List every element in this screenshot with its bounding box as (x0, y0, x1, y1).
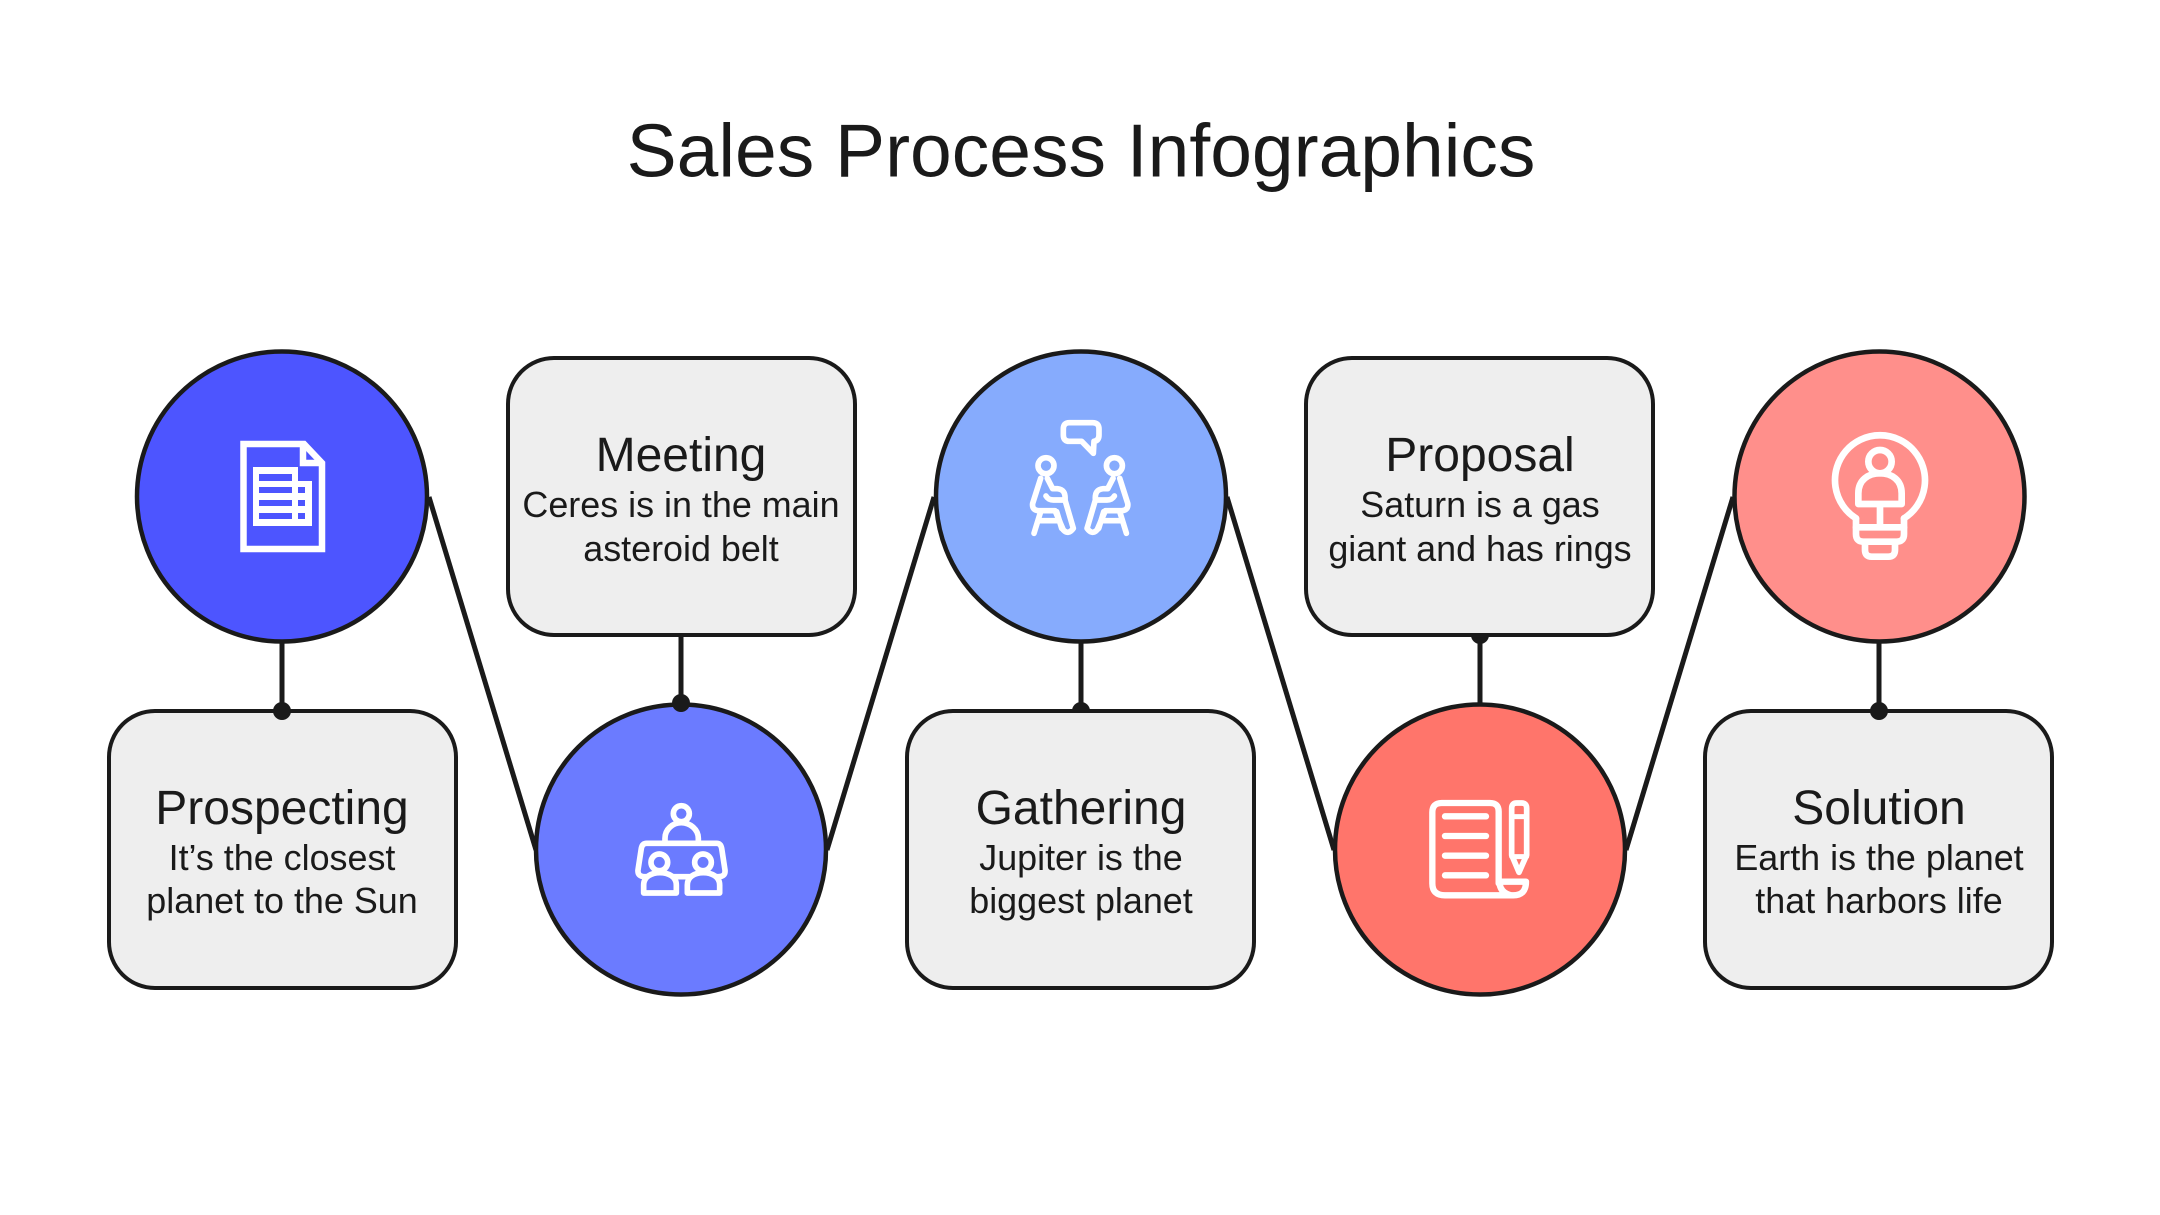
step 3: gathering (907, 352, 1254, 988)
connector: circle 5 to card (1876, 640, 1882, 711)
text: proposal: giant and has rings (1328, 529, 1632, 569)
icon: meeting table (638, 806, 725, 893)
text: solution: that harbors life (1755, 881, 2003, 921)
text: meeting (522, 429, 840, 569)
text: meeting: Meeting (596, 429, 766, 482)
connector lines between circles (429, 497, 1733, 850)
connector: circle 1 to card (280, 640, 284, 711)
text: solution: Solution (1792, 782, 1966, 835)
text: prospecting (146, 782, 418, 921)
text: proposal (1328, 429, 1632, 569)
text: gathering: Gathering (976, 782, 1186, 835)
connector: card to circle 2 (678, 635, 684, 703)
text: meeting: asteroid belt (583, 529, 779, 569)
text: gathering: biggest planet (969, 881, 1193, 921)
circle: proposal (1335, 704, 1625, 994)
circle: prospecting (137, 352, 427, 642)
text: prospecting: It’s the closest (169, 838, 395, 878)
circle: meeting (536, 704, 826, 994)
connector dot (672, 694, 690, 712)
connector: circle 3 to card (1078, 640, 1084, 711)
circle: solution (1734, 352, 2024, 642)
text: gathering (969, 782, 1193, 921)
icon: two people talking (1033, 423, 1128, 533)
title: Sales Process Infographics (627, 108, 1535, 192)
panel: gathering card (907, 711, 1254, 988)
text: prospecting: planet to the Sun (146, 881, 418, 921)
connector dot (1072, 702, 1090, 720)
connector dot (1870, 702, 1888, 720)
step 1: prospecting (109, 352, 456, 988)
circle: gathering (936, 352, 1226, 642)
step 2: meeting (508, 358, 855, 994)
text: gathering: Jupiter is the (979, 838, 1183, 878)
text: solution: Earth is the planet (1734, 838, 2024, 878)
icon: light bulb with person (1835, 435, 1925, 557)
panel: meeting card (508, 358, 855, 635)
panel: proposal card (1306, 358, 1653, 635)
text: solution (1734, 782, 2024, 921)
connector dot (1471, 626, 1489, 644)
text: prospecting: Prospecting (155, 782, 409, 835)
icon: document (244, 444, 322, 549)
text: meeting: Ceres is in the main (522, 485, 840, 525)
text: proposal: Proposal (1385, 429, 1575, 482)
connector: card to circle 4 (1478, 635, 1482, 703)
connector dot (273, 702, 291, 720)
icon: notes and pencil (1432, 803, 1527, 895)
step 5: solution (1705, 352, 2052, 988)
text: proposal: Saturn is a gas (1360, 485, 1600, 525)
panel: prospecting card (109, 711, 456, 988)
step 4: proposal (1306, 358, 1653, 994)
panel: solution card (1705, 711, 2052, 988)
